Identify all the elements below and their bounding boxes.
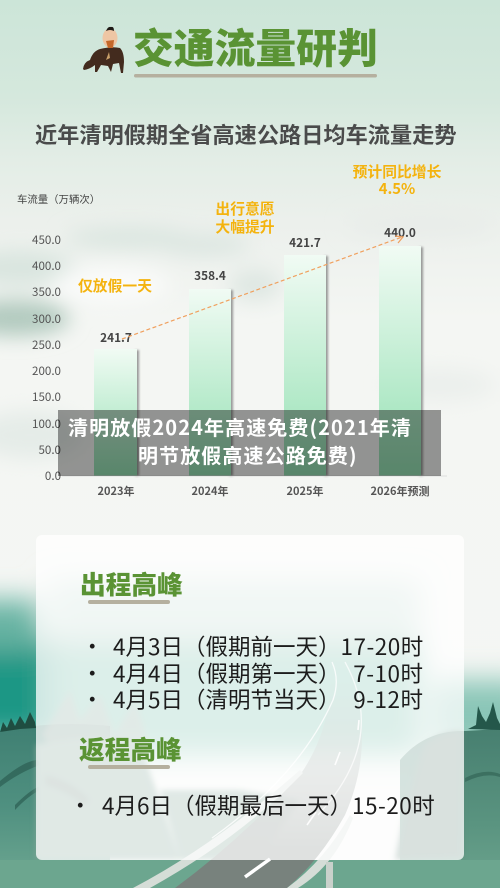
heading: 出程高峰: 出程高峰	[80, 565, 183, 602]
list: departure peaks: 4月3日（假期前一天）17-20时	[113, 630, 423, 662]
panel: white translucent schedule card	[36, 535, 464, 860]
annotations: 预计同比增长	[353, 161, 442, 182]
caption overlay banner: 明节放假高速公路免费)	[138, 440, 358, 469]
y axis labels	[32, 232, 61, 484]
list: return peak: •	[69, 789, 92, 821]
annotations: 4.5%	[379, 178, 415, 199]
list: departure peaks: 4月4日（假期第一天）	[113, 657, 340, 689]
list: departure peaks: •	[81, 630, 104, 662]
title: 交通流量研判: 交通流量研判	[133, 16, 378, 75]
y axis labels: 0.0	[45, 468, 61, 484]
list: return peak: 4月6日（假期最后一天）15-20时	[102, 789, 435, 821]
list: departure peaks: •	[81, 683, 104, 715]
right trees	[468, 702, 500, 730]
y axis labels: 250.0	[32, 337, 61, 353]
y axis labels: 400.0	[32, 258, 61, 274]
road	[175, 660, 362, 888]
caption overlay banner	[58, 410, 441, 476]
value labels: 440.0	[384, 224, 416, 241]
right mountain	[400, 729, 500, 888]
annotations: 仅放假一天	[78, 275, 152, 296]
annotations: 出行意愿	[215, 198, 275, 219]
left trees	[0, 712, 36, 732]
y axis labels: 200.0	[32, 363, 61, 379]
title with ox rider icon	[83, 16, 378, 78]
heading underline	[88, 600, 170, 604]
x axis labels	[98, 483, 429, 499]
x axis labels: 2025年	[287, 483, 323, 499]
value labels: 241.7	[100, 329, 132, 346]
y axis labels: 300.0	[32, 311, 61, 327]
left mountain	[0, 724, 110, 888]
value labels: 421.7	[289, 234, 321, 251]
value labels	[100, 224, 416, 346]
y axis labels: 150.0	[32, 389, 61, 405]
y axis labels: 100.0	[32, 416, 61, 432]
annotations: 大幅提升	[215, 216, 275, 237]
x axis labels: 2023年	[98, 483, 134, 499]
heading underline	[88, 765, 170, 769]
value labels: 358.4	[194, 267, 226, 284]
list: departure peaks: 4月5日（清明节当天）	[113, 683, 340, 715]
caption overlay banner: 清明放假2024年高速免费(2021年清	[68, 412, 412, 441]
bars	[94, 246, 421, 476]
annotations	[78, 161, 442, 296]
y axis labels: 350.0	[32, 284, 61, 300]
inner hills seen through the panel	[36, 690, 462, 860]
list: departure peaks: 9-12时	[353, 683, 423, 715]
y axis labels: 450.0	[32, 232, 61, 248]
x axis labels: 2026年预测	[371, 483, 429, 499]
list: departure peaks: •	[81, 657, 104, 689]
x axis labels: 2024年	[192, 483, 228, 499]
chart heading: 近年清明假期全省高速公路日均车流量走势	[35, 118, 457, 150]
list: departure peaks: 7-10时	[353, 657, 423, 689]
y axis title: 车流量（万辆次）	[17, 191, 100, 206]
y axis labels: 50.0	[38, 442, 61, 458]
heading: 返程高峰: 返程高峰	[79, 730, 182, 767]
title underline	[134, 74, 377, 78]
icon: herder riding an ox	[83, 27, 124, 73]
trend arrow	[122, 236, 403, 339]
teal mist behind the lower panel	[0, 580, 500, 755]
bar shadows	[135, 247, 423, 476]
